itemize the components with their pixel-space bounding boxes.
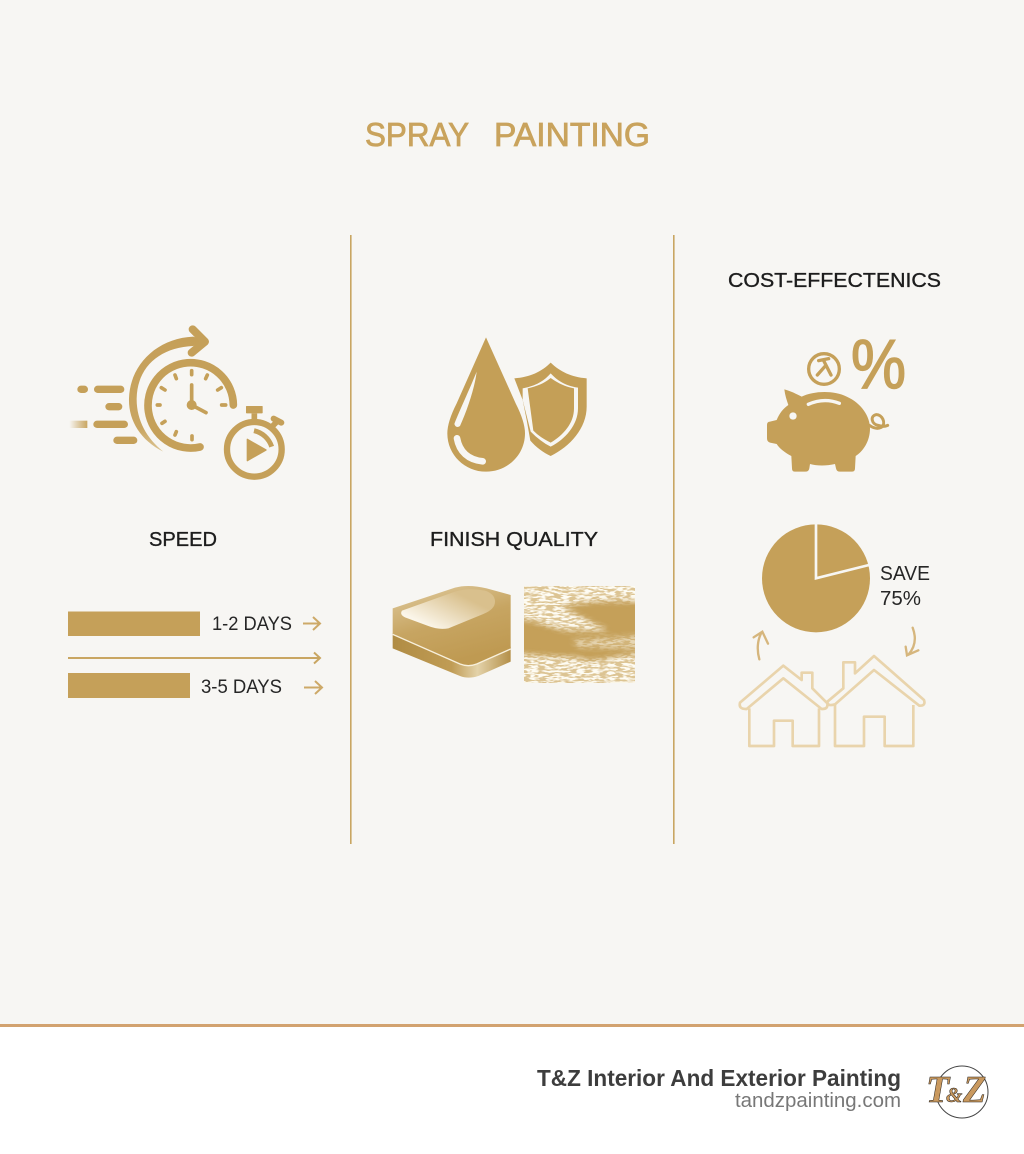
- title: PAINTING: [494, 116, 650, 153]
- arrow: 3-5 days: [304, 681, 322, 694]
- footer background: [0, 1026, 1024, 1154]
- label: save 75%: SAVE: [880, 563, 930, 585]
- bar: 3-5 days: [68, 673, 190, 698]
- logo: &: [946, 1083, 963, 1107]
- arrow: timeline: [68, 652, 320, 664]
- arrow: 1-2 days: [303, 617, 320, 630]
- heading: speed: SPEED: [149, 528, 217, 551]
- coin with hammer: [809, 354, 839, 384]
- website: tandzpainting.com: [735, 1090, 901, 1112]
- panel: cost-effectiveness: [728, 269, 941, 746]
- heading: finish quality: FINISH QUALITY: [430, 528, 598, 551]
- label: 3-5 days: 3-5 DAYS: [201, 677, 282, 698]
- footer rule: [0, 1024, 1024, 1027]
- logo: T: [926, 1069, 951, 1111]
- panel: speed: [68, 329, 322, 698]
- logo: Z: [962, 1069, 986, 1111]
- title: [365, 116, 650, 153]
- bar: 1-2 days: [68, 612, 200, 636]
- icon: piggy bank with coin: [767, 354, 888, 472]
- swatch: smooth spray finish: [393, 586, 511, 678]
- pie chart: [762, 523, 870, 632]
- column divider right: [673, 235, 675, 844]
- stopwatch: [227, 406, 282, 477]
- drop: [447, 337, 525, 472]
- circular arrow: [129, 329, 205, 452]
- clock face: [148, 363, 233, 448]
- swatch: textured finish: [524, 586, 635, 683]
- footer: [0, 1024, 1024, 1154]
- houses: [740, 656, 924, 746]
- panel: finish quality: [393, 337, 635, 683]
- piggy body: [767, 389, 888, 472]
- title: SPRAY: [365, 116, 469, 153]
- icon: drop and shield: [447, 337, 587, 472]
- label: save 75%: [880, 563, 930, 610]
- heading: cost-effectenics: COST-EFFECTENICS: [728, 269, 941, 292]
- comparison bars: [68, 612, 322, 698]
- company name: T&Z Interior And Exterior Painting: [537, 1065, 901, 1091]
- speed lines: [69, 389, 134, 440]
- label: 1-2 days: 1-2 DAYS: [212, 614, 292, 635]
- label: save 75%: 75%: [880, 588, 921, 610]
- curved arrow down: [906, 628, 918, 655]
- icon: clock with speed lines and stopwatch: [69, 329, 282, 477]
- pie chart and houses: [740, 523, 924, 746]
- curved arrow up: [754, 632, 768, 659]
- logo: [926, 1066, 988, 1118]
- shield: [514, 363, 587, 456]
- column divider left: [350, 235, 352, 844]
- percent sign: %: [851, 325, 906, 403]
